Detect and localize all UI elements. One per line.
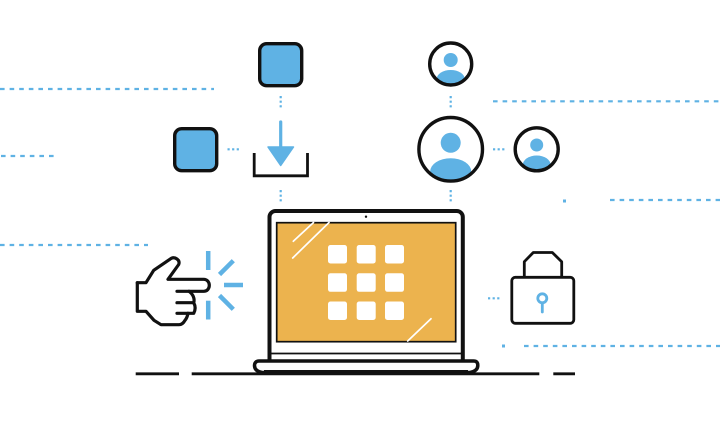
laptop xyxy=(254,211,478,375)
icon: large user avatar xyxy=(419,118,483,184)
laptop screen xyxy=(277,223,456,342)
icon: top user avatar xyxy=(430,43,472,88)
app icon grid xyxy=(328,245,404,320)
icon: click rays xyxy=(208,251,243,320)
dashed lines: background streaks xyxy=(0,89,720,346)
laptop base xyxy=(254,361,478,372)
chin line xyxy=(270,352,462,354)
dotted connectors xyxy=(228,96,505,298)
icon: top blue square xyxy=(260,44,302,86)
laptop lid xyxy=(270,211,463,360)
icon: pointing hand xyxy=(137,258,209,325)
icon: right user avatar xyxy=(515,128,558,174)
icon: left blue square xyxy=(175,129,217,171)
icon: padlock xyxy=(512,252,574,323)
laptop base underside xyxy=(264,370,468,375)
camera dot xyxy=(365,216,367,218)
icon: download arrow and tray xyxy=(254,122,308,176)
ground line xyxy=(136,372,575,375)
screen glare xyxy=(293,222,431,341)
